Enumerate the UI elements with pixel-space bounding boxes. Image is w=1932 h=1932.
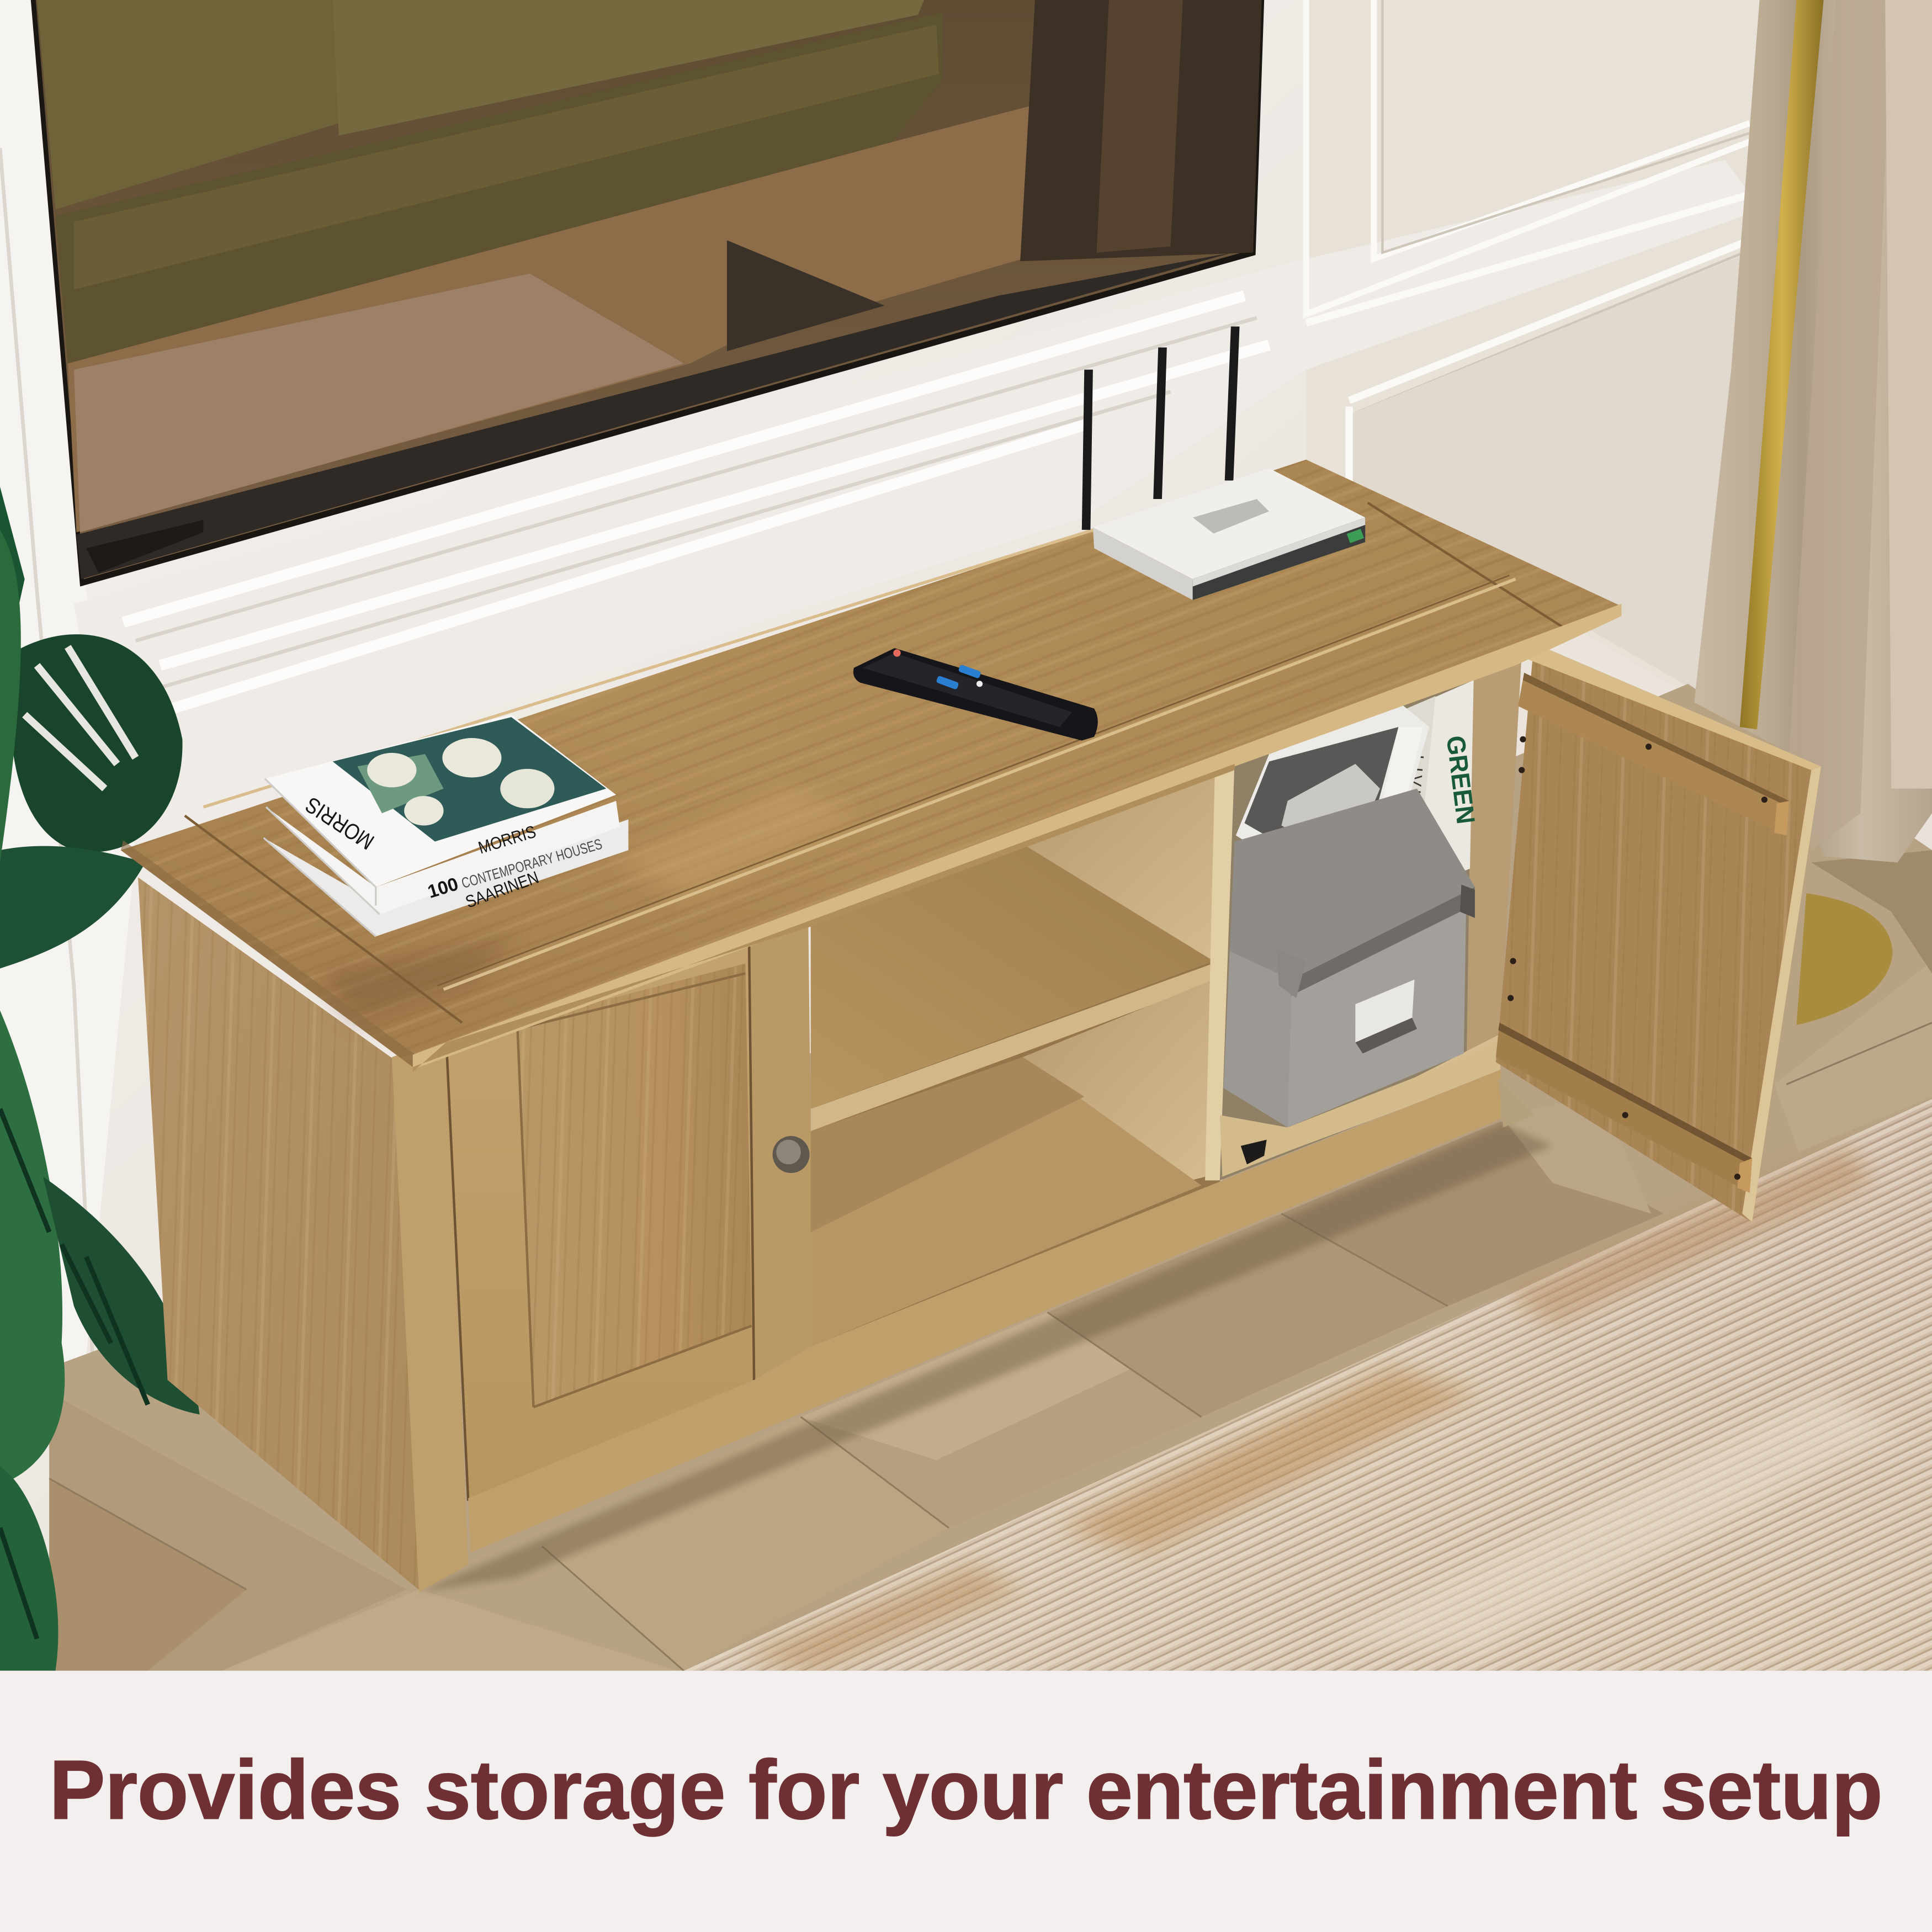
left side panel bbox=[138, 877, 421, 1592]
TV remote control bbox=[853, 648, 1098, 741]
caption heading: Provides storage for your entertainment setup bbox=[49, 1744, 1883, 1837]
open shelving compartment bbox=[811, 761, 1235, 1346]
stack of white books bbox=[264, 715, 628, 936]
open right door bbox=[1496, 643, 1821, 1222]
book spine: 100: 100 bbox=[426, 874, 461, 903]
photo book bbox=[1236, 705, 1429, 922]
book cover title: MORRIS bbox=[301, 792, 379, 854]
floor lamp bbox=[1740, 0, 1893, 1025]
grey storage box bbox=[1224, 789, 1475, 1127]
caption band bbox=[0, 1671, 1932, 1932]
cabinet floor shadow bbox=[419, 1124, 1552, 1592]
door batten bottom bbox=[1496, 958, 1752, 1193]
wifi router bbox=[1082, 327, 1365, 600]
door batten top bbox=[1518, 673, 1789, 835]
plant: lower leaves bbox=[0, 1010, 200, 1671]
door knob bbox=[773, 1136, 810, 1173]
TV cabinet bbox=[121, 460, 1821, 1592]
book spine: CONTEMPORARY HOUSES: CONTEMPORARY HOUSES bbox=[460, 836, 604, 891]
TV reflection: floor and rug bbox=[68, 0, 1262, 579]
book spine: MORRIS: MORRIS bbox=[476, 822, 538, 858]
book spine: SAARINEN: SAARINEN bbox=[463, 867, 542, 912]
floor bbox=[49, 684, 1932, 1671]
spine: LIVING: LIVING bbox=[1402, 753, 1427, 826]
front corner post bbox=[392, 1037, 468, 1592]
TV screen bbox=[31, 0, 1264, 586]
curtain bbox=[1694, 0, 1932, 862]
spine: GREEN: GREEN bbox=[1441, 734, 1480, 826]
plant: upper monstera bbox=[0, 487, 183, 968]
rug bbox=[684, 1099, 1932, 1671]
bottom rail bbox=[468, 1070, 1501, 1552]
router antennas bbox=[1082, 327, 1240, 530]
small dark bracket bbox=[1241, 1140, 1267, 1164]
books upright bbox=[1386, 680, 1480, 899]
TV reflection: sofa bbox=[37, 0, 943, 363]
left door bbox=[446, 922, 813, 1501]
cabinet top surface bbox=[121, 460, 1622, 1072]
plinth foot bbox=[1498, 1078, 1534, 1127]
right compartment bbox=[1220, 653, 1522, 1180]
